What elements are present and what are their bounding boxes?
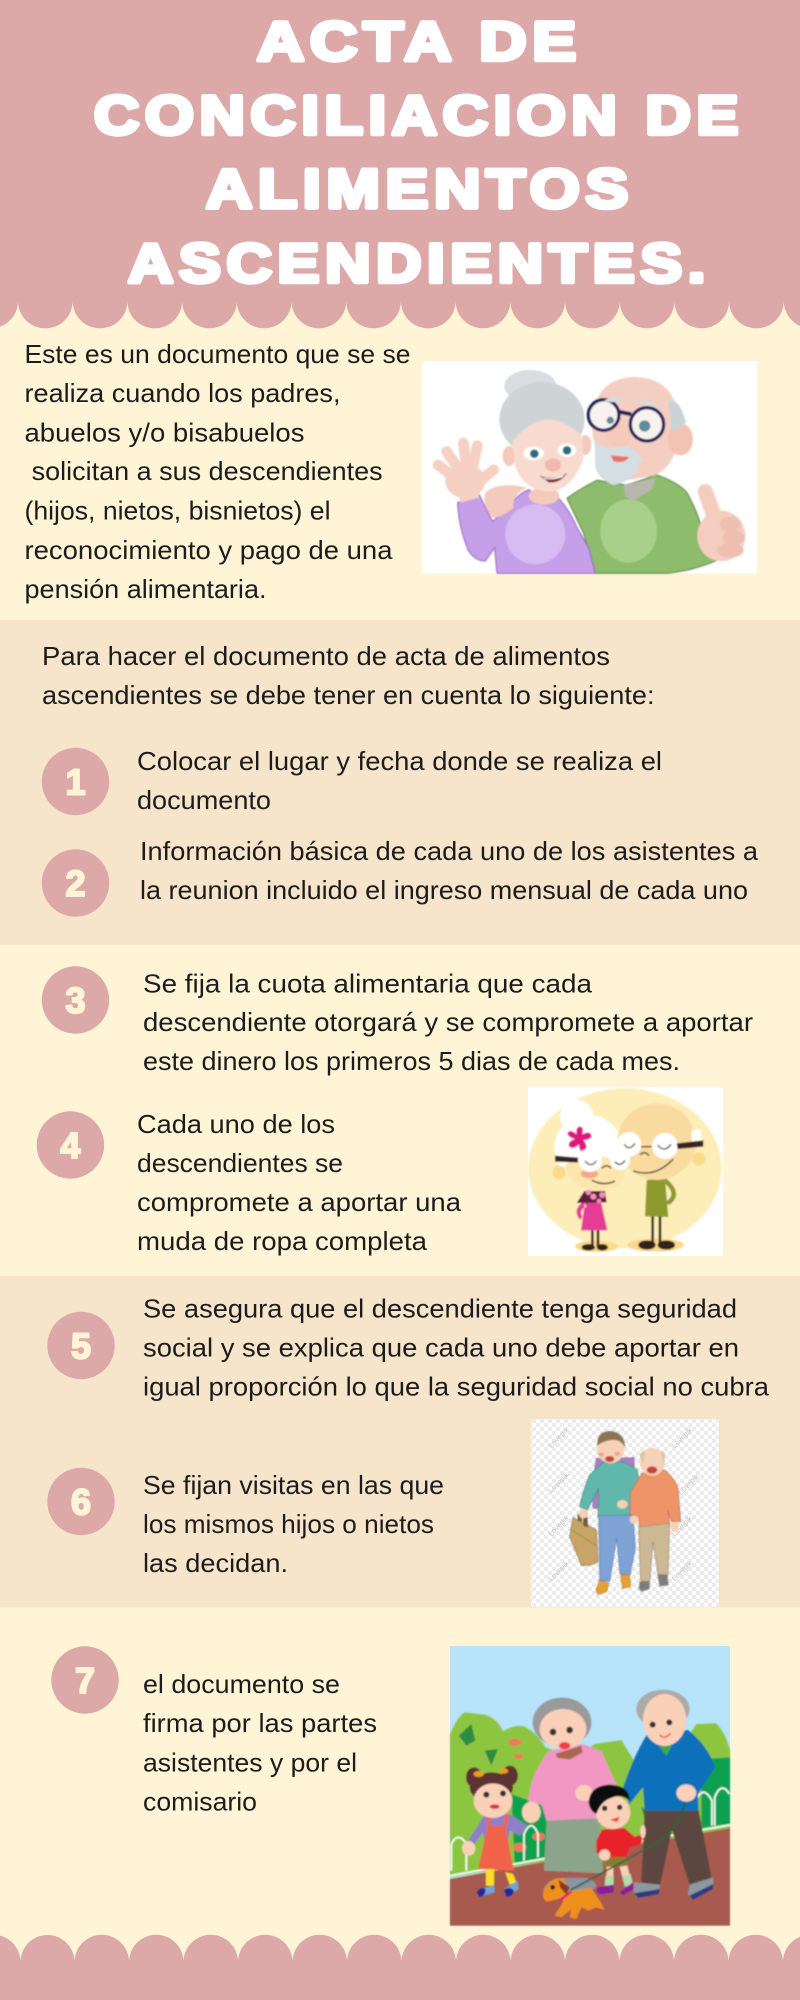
title: [94, 10, 744, 294]
step 3: descendiente otorgará y se compromete a aportar: [143, 1007, 753, 1037]
step 1: documento: [137, 785, 271, 815]
illustration: grandparents waving: [422, 361, 757, 573]
step 7: 7: [75, 1660, 95, 1701]
title: ASCENDIENTES.: [128, 232, 711, 294]
step 6: los mismos hijos o nietos: [143, 1509, 434, 1539]
panel: instructions band 1: [0, 620, 800, 945]
illustration: young man walking with elderly man: Lovepik: [546, 1470, 571, 1495]
illustration: young man walking with elderly man: Lovepik: [546, 1425, 571, 1450]
illustration: young man walking with elderly man: Lovepik: [546, 1559, 571, 1583]
step 6: las decidan.: [143, 1548, 288, 1578]
step 6: 6: [71, 1482, 91, 1522]
step 7: comisario: [143, 1786, 257, 1816]
illustration: young man walking with elderly man: Lovepik: [670, 1514, 694, 1538]
step 2: la reunion incluido el ingreso mensual de cada uno: [140, 875, 748, 905]
text block: introduction: Este es un documento que se se: [24, 339, 410, 369]
step 6: [47, 1468, 444, 1578]
step 4: Cada uno de los: [137, 1109, 335, 1139]
step 7: asistentes y por el: [143, 1747, 357, 1777]
step 2: [42, 836, 759, 917]
step 5: social y se explica que cada uno debe aportar en: [143, 1333, 739, 1363]
step 7: el documento se: [143, 1669, 340, 1699]
step 6: Se fijan visitas en las que: [143, 1470, 444, 1500]
illustration: young man walking with elderly man: Lovepik: [670, 1425, 694, 1450]
text block: introduction: reconocimiento y pago de una: [24, 535, 393, 565]
title: ALIMENTOS: [206, 158, 634, 220]
step 3: [42, 966, 753, 1076]
panel: footer scalloped band: [0, 1935, 800, 2000]
text block: introduction: abuelos y/o bisabuelos: [24, 418, 304, 448]
text block: introduction: solicitan a sus descendientes: [32, 456, 383, 486]
step 5: [47, 1294, 770, 1402]
illustration: young man walking with elderly man: Lovepik: [676, 1472, 701, 1496]
step 7: firma por las partes: [143, 1708, 377, 1738]
step 2: Información básica de cada uno de los asistentes a: [140, 836, 759, 866]
panel: header banner with scalloped edge: [0, 0, 800, 328]
text block: lead-in: ascendientes se debe tener en cuenta lo siguiente:: [42, 680, 654, 710]
text block: introduction: (hijos, nietos, bisnietos) el: [24, 496, 330, 526]
title: ACTA DE: [257, 10, 582, 72]
illustration: young man walking with elderly man: [531, 1419, 719, 1607]
text block: introduction: [24, 339, 410, 604]
illustration: smiling cartoon couple: [528, 1087, 723, 1256]
step 4: 4: [60, 1125, 80, 1166]
step 4: descendientes se: [137, 1148, 343, 1178]
step 2: 2: [65, 863, 86, 904]
step 4: [37, 1109, 462, 1256]
step 4: muda de ropa completa: [137, 1226, 428, 1256]
step 3: Se fija la cuota alimentaria que cada: [143, 968, 593, 998]
text block: lead-in: [42, 641, 654, 710]
title: CONCILIACION DE: [94, 84, 744, 146]
step 3: este dinero los primeros 5 dias de cada mes.: [143, 1046, 680, 1076]
text block: introduction: pensión alimentaria.: [24, 574, 266, 604]
illustration: family walking the dog: [450, 1646, 730, 1926]
illustration: young man walking with elderly man: Lovepik: [670, 1559, 694, 1583]
step 1: Colocar el lugar y fecha donde se realiza el: [137, 746, 662, 776]
step 3: 3: [65, 980, 86, 1021]
text block: lead-in: Para hacer el documento de acta de alimentos: [42, 641, 610, 671]
step 1: 1: [65, 762, 86, 802]
text block: introduction: realiza cuando los padres,: [24, 378, 340, 408]
step 5: Se asegura que el descendiente tenga seguridad: [143, 1294, 737, 1324]
step 5: 5: [71, 1326, 91, 1366]
illustration: young man walking with elderly man: Lovepik: [546, 1514, 571, 1538]
step 4: compromete a aportar una: [137, 1187, 462, 1217]
step 5: igual proporción lo que la seguridad social no cubra: [143, 1372, 770, 1402]
step 7: [51, 1646, 377, 1816]
panel: instructions band 2: [0, 1276, 800, 1608]
step 1: [42, 746, 662, 815]
